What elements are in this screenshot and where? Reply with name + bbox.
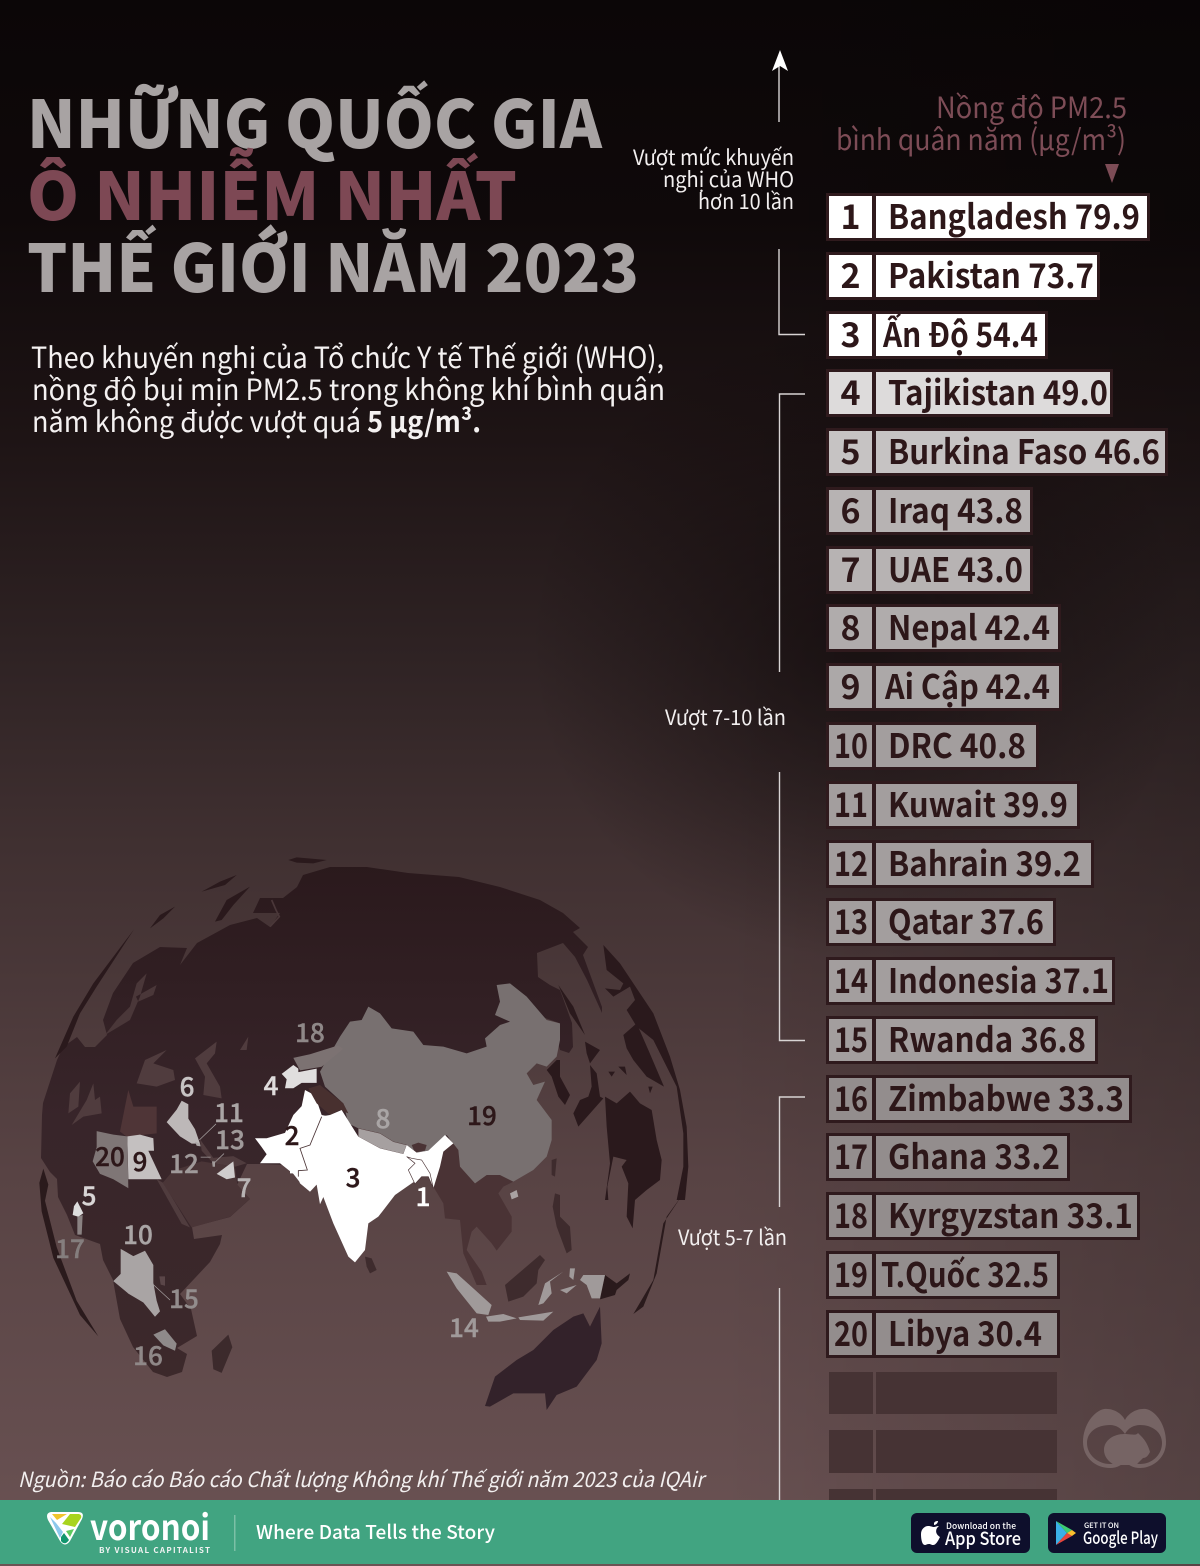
row 7 UAE xyxy=(826,543,1033,594)
row 11 Kuwait: 11 xyxy=(834,778,868,827)
row 16 Zimbabwe: 16 xyxy=(834,1072,868,1121)
intro paragraph: Theo khuyến nghị của Tổ chức Y tế Thế giới (WHO), xyxy=(31,335,664,377)
map rank labels: 13 xyxy=(215,1120,245,1157)
row 15 Rwanda: 15 xyxy=(834,1013,868,1062)
icon: voronoi logo xyxy=(47,1512,83,1544)
row 6 Iraq: Iraq 43.8 xyxy=(888,484,1023,533)
map rank labels xyxy=(55,1013,497,1373)
northwest Pacific and North America xyxy=(547,945,688,1228)
map rank labels: 11 xyxy=(214,1093,244,1130)
row 7 UAE: UAE 43.0 xyxy=(888,543,1023,592)
country: China, Nepal, India and Bangladesh xyxy=(290,983,560,1262)
map rank labels: 8 xyxy=(376,1099,390,1136)
row 17 Ghana: 17 xyxy=(834,1130,868,1179)
dark landmass: Eurasia and Africa xyxy=(41,867,602,1377)
title: NHỮNG QUỐC GIA xyxy=(27,72,603,168)
row 10 DRC: 10 xyxy=(834,719,868,768)
row 20 Libya: 20 xyxy=(834,1307,868,1356)
row 6 Iraq xyxy=(826,484,1033,535)
axis label: 5 to 7 times: Vượt 5-7 lần xyxy=(678,1222,787,1252)
wordmark: voronoi xyxy=(90,1500,210,1551)
ranking column header: bình quân năm (µg/m³) xyxy=(836,117,1126,159)
row 13 Qatar: Qatar 37.6 xyxy=(888,895,1044,944)
map rank labels: 9 xyxy=(133,1142,147,1179)
row 9 Egypt: Ai Cập 42.4 xyxy=(884,660,1050,709)
row 6 Iraq: 6 xyxy=(840,484,861,533)
title: THẾ GIỚI NĂM 2023 xyxy=(27,216,639,312)
Madagascar xyxy=(212,1335,232,1373)
row 1 Bangladesh: 1 xyxy=(840,190,861,239)
row 12 Bahrain: Bahrain 39.2 xyxy=(888,837,1081,886)
row 3 India xyxy=(826,308,1048,359)
map rank labels: 1 xyxy=(416,1177,430,1214)
badge: App Store: Download on the xyxy=(946,1520,1016,1532)
row 3 India: 3 xyxy=(840,308,861,357)
row 17 Ghana: Ghana 33.2 xyxy=(888,1130,1060,1179)
empty placeholder rows xyxy=(829,1372,1057,1501)
map rank labels: 4 xyxy=(264,1066,279,1103)
row 20 Libya: Libya 30.4 xyxy=(888,1307,1042,1356)
ranking column header: Nồng độ PM2.5 xyxy=(936,85,1127,127)
map rank labels: 5 xyxy=(82,1176,96,1213)
map rank labels: 3 xyxy=(346,1158,360,1195)
map rank labels: 7 xyxy=(237,1168,251,1205)
wordmark subline: BY VISUAL CAPITALIST xyxy=(99,1545,210,1556)
Atlantic sliver xyxy=(39,1169,98,1336)
countries: Central Asia, Middle East and Africa xyxy=(73,1045,343,1351)
globe map xyxy=(39,857,688,1410)
row 13 Qatar: 13 xyxy=(834,895,868,944)
map rank labels: 18 xyxy=(295,1013,325,1050)
row 2 Pakistan: Pakistan 73.7 xyxy=(888,249,1094,298)
intro paragraph xyxy=(31,335,665,441)
row 16 Zimbabwe: Zimbabwe 33.3 xyxy=(888,1072,1124,1121)
map rank labels: 10 xyxy=(123,1215,153,1252)
Arabia lighter tone xyxy=(163,1161,250,1227)
row 11 Kuwait: Kuwait 39.9 xyxy=(888,778,1068,827)
map rank labels: 19 xyxy=(467,1096,497,1133)
row 5 Burkina Faso: 5 xyxy=(840,425,861,474)
row 14 Indonesia: 14 xyxy=(834,954,868,1003)
intro paragraph: nồng độ bụi mịn PM2.5 trong không khí bình quân xyxy=(32,367,665,409)
row 5 Burkina Faso: Burkina Faso 46.6 xyxy=(888,425,1160,474)
map rank labels: 20 xyxy=(95,1137,125,1174)
row 19 China: 19 xyxy=(834,1248,868,1297)
row 12 Bahrain: 12 xyxy=(834,837,868,886)
footer bar xyxy=(0,1500,1200,1564)
axis label: over 10 times: hơn 10 lần xyxy=(698,186,794,216)
map rank labels: 2 xyxy=(285,1116,299,1153)
row 18 Kyrgyzstan: 18 xyxy=(834,1189,868,1238)
row 2 Pakistan: 2 xyxy=(840,249,861,298)
badge: App Store: App Store xyxy=(945,1525,1021,1551)
axis label: over 10 times: nghị của WHO xyxy=(663,164,794,194)
badge: Google Play: GET IT ON xyxy=(1084,1520,1119,1531)
row 19 China: T.Quốc 32.5 xyxy=(881,1248,1049,1297)
axis label: over 10 times: Vượt mức khuyến xyxy=(633,142,794,172)
scale axis with arrow and brackets xyxy=(772,50,805,1500)
axis label: 7 to 10 times: Vượt 7-10 lần xyxy=(665,702,786,732)
watermark icon: binoculars xyxy=(1083,1409,1166,1468)
row 19 China xyxy=(826,1248,1060,1299)
row 18 Kyrgyzstan: Kyrgyzstan 33.1 xyxy=(888,1189,1133,1238)
badge: Google Play xyxy=(1048,1513,1166,1553)
row 9 Egypt: 9 xyxy=(840,660,861,709)
row 14 Indonesia: Indonesia 37.1 xyxy=(888,954,1109,1003)
row 8 Nepal: 8 xyxy=(840,601,861,650)
row 13 Qatar xyxy=(826,895,1056,946)
title xyxy=(27,72,639,312)
ranking list xyxy=(826,190,1168,1358)
map rank labels: 6 xyxy=(180,1067,194,1104)
intro paragraph: năm không được vượt quá 5 µg/m³. xyxy=(32,399,481,441)
row 1 Bangladesh: Bangladesh 79.9 xyxy=(888,190,1140,239)
map rank labels: 14 xyxy=(449,1308,479,1345)
row 15 Rwanda: Rwanda 36.8 xyxy=(888,1013,1086,1062)
seas and southern details xyxy=(39,1139,250,1373)
map rank labels: 17 xyxy=(55,1229,85,1266)
Southeast Asia and Oceania xyxy=(365,1143,688,1410)
ranking column header xyxy=(836,85,1127,183)
row 4 Tajikistan: Tajikistan 49.0 xyxy=(888,366,1108,415)
badge: App Store xyxy=(911,1513,1030,1553)
map rank labels: 16 xyxy=(133,1336,163,1373)
badge: Google Play: Google Play xyxy=(1083,1524,1159,1549)
row 10 DRC: DRC 40.8 xyxy=(888,719,1026,768)
map rank labels: 12 xyxy=(169,1144,199,1181)
map rank labels: 15 xyxy=(169,1279,199,1316)
source line: Nguồn: Báo cáo Báo cáo Chất lượng Không khí Thế giới năm 2023 của IQAir xyxy=(18,1464,708,1494)
row 10 DRC xyxy=(826,719,1039,770)
country: Indonesia xyxy=(447,1268,605,1322)
row 20 Libya xyxy=(826,1307,1060,1358)
tagline: Where Data Tells the Story xyxy=(256,1518,496,1545)
axis label: over 10 times xyxy=(633,142,794,216)
row 4 Tajikistan: 4 xyxy=(840,366,861,415)
country: Pakistan xyxy=(255,1090,340,1204)
row 8 Nepal xyxy=(826,601,1061,652)
title: Ô NHIỄM NHẤT xyxy=(27,144,517,240)
row 8 Nepal: Nepal 42.4 xyxy=(888,601,1050,650)
western sliver and seas xyxy=(55,857,327,1137)
row 3 India: Ấn Độ 54.4 xyxy=(882,308,1038,357)
row 7 UAE: 7 xyxy=(840,543,861,592)
